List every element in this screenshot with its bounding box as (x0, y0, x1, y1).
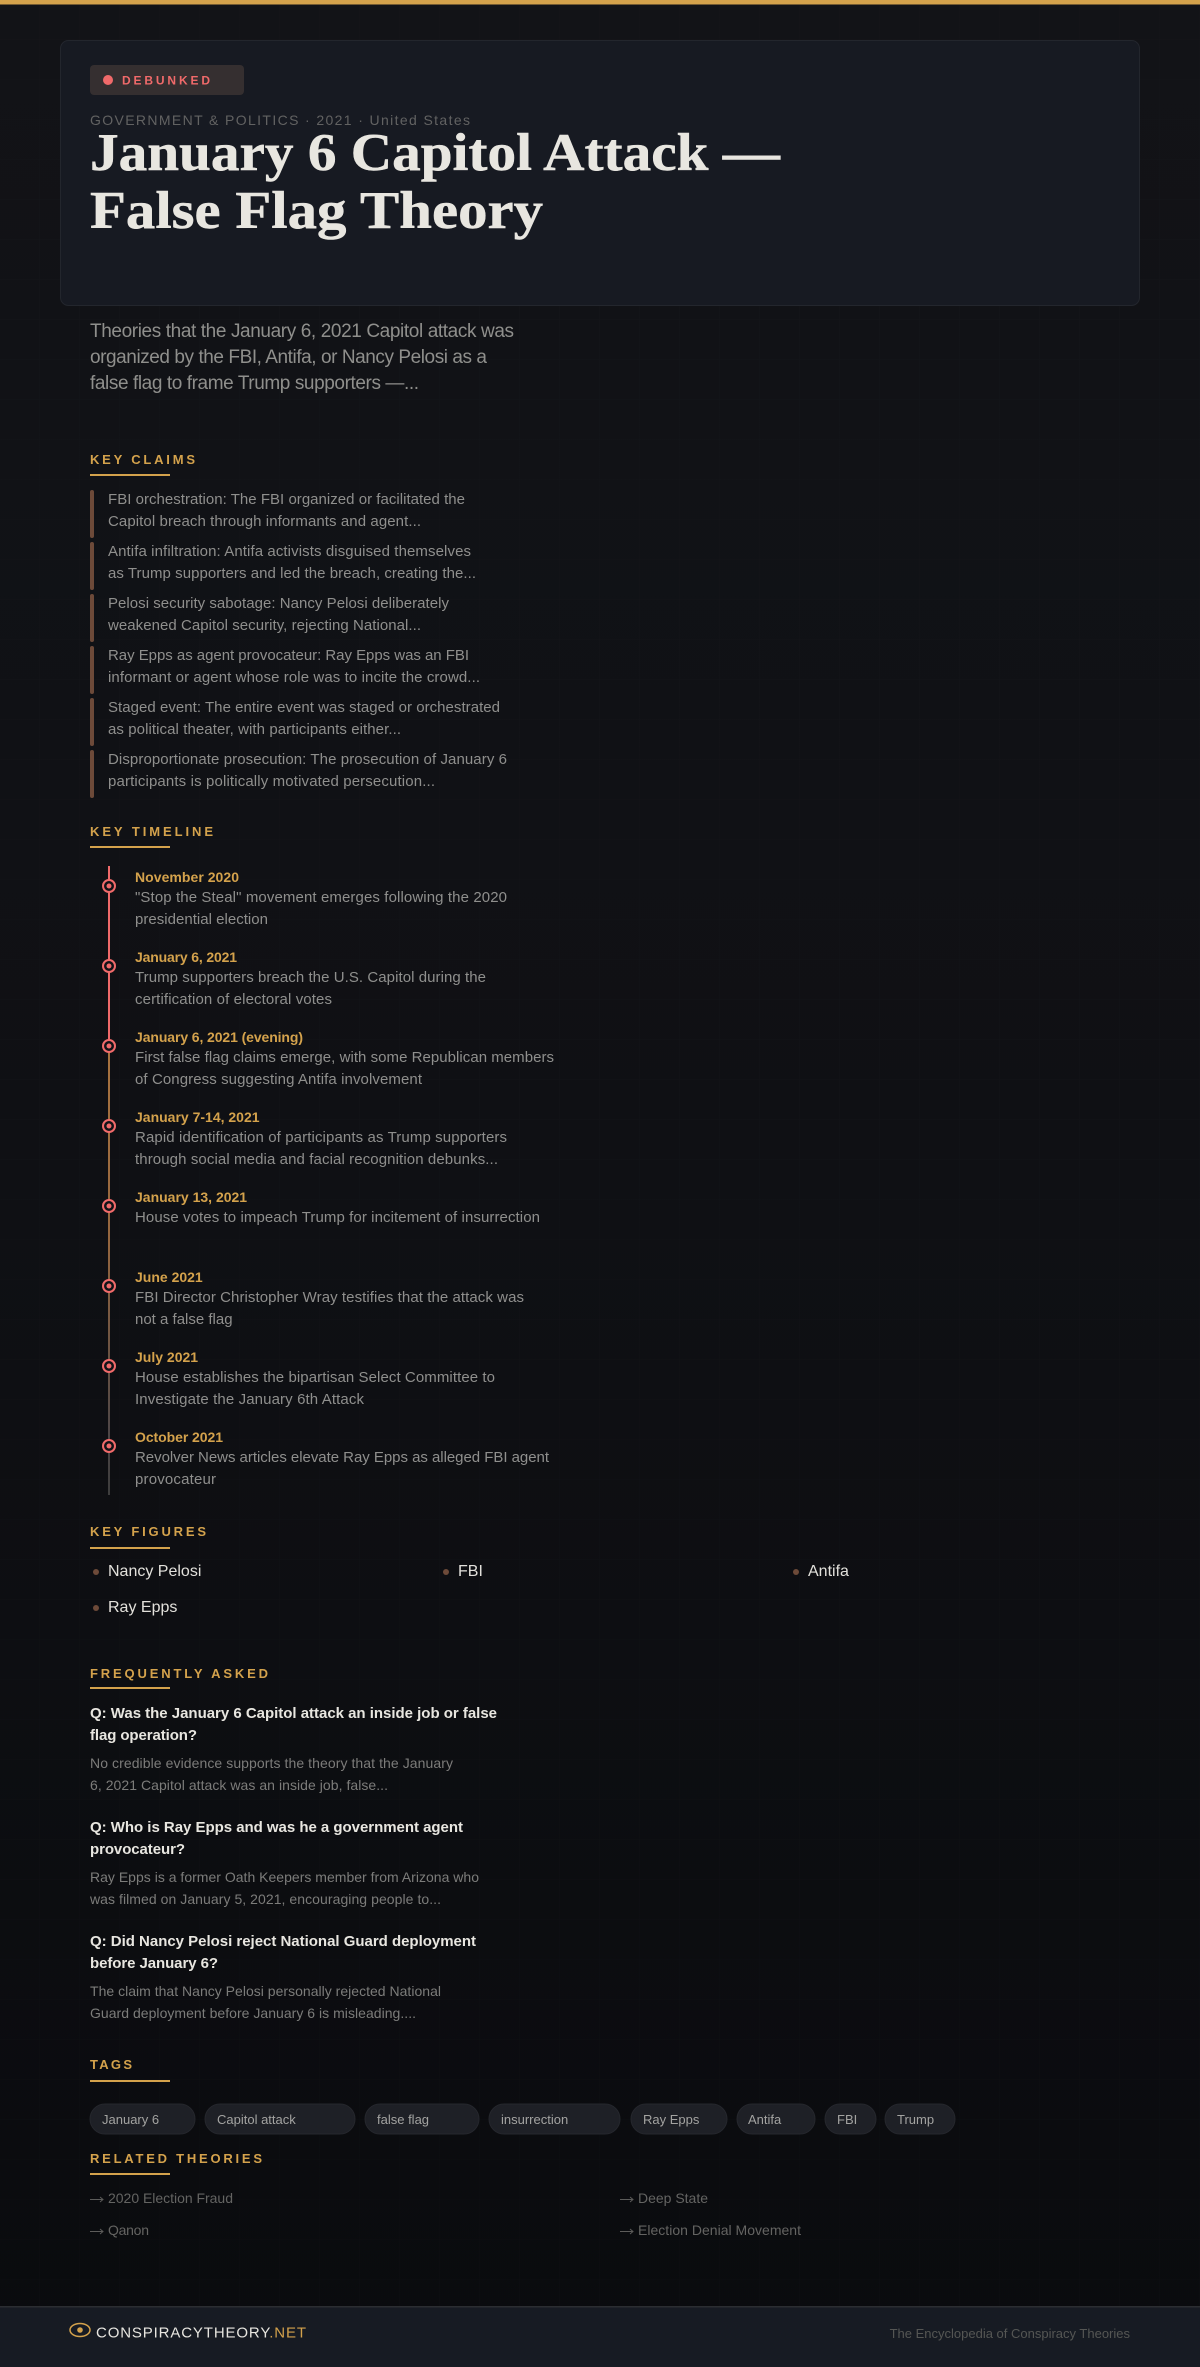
claim 6 (90, 750, 507, 798)
faq item 2: Ray Epps is a former Oath Keepers member from Arizona who (90, 1869, 479, 1885)
heading: key claims (90, 452, 198, 476)
summary text: Theories that the January 6, 2021 Capitol attack was (90, 321, 514, 342)
title (90, 124, 781, 240)
event: January 7-14, 2021: Rapid identification of participants as Trump supporters (135, 1129, 507, 1146)
claim 2: as Trump supporters and led the breach, creating the... (108, 565, 476, 582)
link: Election Denial Movement: Election Denial Movement (638, 2222, 801, 2238)
section: key claims (90, 452, 507, 798)
claim 3: weakened Capitol security, rejecting National... (107, 617, 421, 634)
section: key timeline (90, 824, 554, 1495)
heading: key timeline (90, 824, 216, 848)
heading: key figures: KEY FIGURES (90, 1524, 209, 1539)
claim 6: participants is politically motivated persecution... (108, 773, 435, 790)
heading: key timeline: KEY TIMELINE (90, 824, 216, 839)
claim 4: informant or agent whose role was to incite the crowd... (108, 669, 480, 686)
heading: tags: TAGS (90, 2057, 135, 2072)
claim 1: FBI orchestration: The FBI organized or facilitated the (108, 491, 465, 508)
event: January 6, 2021 evening: of Congress suggesting Antifa involvement (135, 1071, 423, 1088)
figure: Nancy Pelosi: Nancy Pelosi (108, 1563, 201, 1580)
section: tags (90, 2057, 955, 2134)
event: June 2021: not a false flag (135, 1311, 233, 1328)
tag: false flag: false flag (377, 2112, 429, 2127)
event: October 2021: Revolver News articles elevate Ray Epps as alleged FBI agent (135, 1449, 550, 1466)
claim 5: as political theater, with participants either... (108, 721, 401, 738)
event: July 2021: Investigate the January 6th Attack (135, 1391, 364, 1408)
tag: Trump (885, 2104, 955, 2134)
event: January 6, 2021 evening: January 6, 2021 (evening) (135, 1029, 303, 1045)
event: June 2021 (103, 1269, 524, 1328)
footer tagline: The Encyclopedia of Conspiracy Theories (890, 2326, 1130, 2341)
event: November 2020: November 2020 (135, 869, 239, 885)
claim 5 (90, 698, 500, 746)
event: January 6, 2021: certification of electoral votes (135, 991, 332, 1008)
claim 3 (90, 594, 450, 642)
faq item 1: Q: Was the January 6 Capitol attack an inside job or false (90, 1705, 497, 1722)
link: 2020 Election Fraud: 2020 Election Fraud (108, 2190, 233, 2206)
heading: frequently asked: FREQUENTLY ASKED (90, 1666, 271, 1681)
event: June 2021: June 2021 (135, 1269, 203, 1285)
heading: key figures (90, 1524, 209, 1549)
section: frequently asked (89, 1666, 497, 2021)
title: False Flag Theory (90, 182, 543, 240)
claim 1 (90, 490, 465, 538)
faq item 2 (89, 1819, 479, 1907)
event: January 7-14, 2021 (103, 1109, 507, 1168)
event: October 2021 (103, 1429, 550, 1488)
event: January 13, 2021: January 13, 2021 (135, 1189, 247, 1205)
faq item 3: Q: Did Nancy Pelosi reject National Guard deployment (90, 1933, 476, 1950)
faq item 3: before January 6? (90, 1955, 218, 1972)
event: July 2021 (103, 1349, 495, 1408)
figure: FBI (443, 1563, 483, 1580)
faq item 2: provocateur? (90, 1841, 185, 1858)
event: January 7-14, 2021: through social media and facial recognition debunks... (135, 1151, 498, 1168)
icon: eye logo (70, 2324, 90, 2336)
tag: Antifa (737, 2104, 815, 2134)
event: January 6, 2021 evening: First false flag claims emerge, with some Republican members (135, 1049, 554, 1066)
figure: Antifa: Antifa (808, 1563, 849, 1580)
tag: January 6 (90, 2104, 195, 2134)
status badge: debunked: DEBUNKED (122, 74, 210, 88)
tag: Ray Epps (631, 2104, 727, 2134)
title: January 6 Capitol Attack — (90, 124, 781, 182)
tag: Ray Epps: Ray Epps (643, 2112, 700, 2127)
event: July 2021: July 2021 (135, 1349, 198, 1365)
link: Deep State: Deep State (638, 2190, 708, 2206)
event: January 7-14, 2021: January 7-14, 2021 (135, 1109, 260, 1125)
figure: FBI: FBI (458, 1563, 483, 1580)
claim 4: Ray Epps as agent provocateur: Ray Epps was an FBI (108, 647, 469, 664)
faq item 3: The claim that Nancy Pelosi personally rejected National (90, 1983, 441, 1999)
tag: FBI: FBI (837, 2112, 857, 2127)
faq item 2: Q: Who is Ray Epps and was he a government agent (90, 1819, 463, 1836)
summary text: organized by the FBI, Antifa, or Nancy Pelosi as a (90, 347, 487, 368)
tag: FBI (825, 2104, 876, 2134)
timeline line (108, 866, 110, 1495)
tag: insurrection (489, 2104, 620, 2134)
faq item 1: No credible evidence supports the theory that the January (90, 1755, 453, 1771)
claim 4 (90, 646, 480, 694)
faq item 1: 6, 2021 Capitol attack was an inside job, false... (90, 1777, 388, 1793)
section: related theories (90, 2151, 801, 2238)
claim 2 (90, 542, 476, 590)
tag: January 6: January 6 (102, 2112, 159, 2127)
faq item 1: flag operation? (90, 1727, 197, 1744)
tag: Trump: Trump (897, 2112, 934, 2127)
event: October 2021: October 2021 (135, 1429, 223, 1445)
heading: tags (90, 2057, 170, 2082)
section: key figures (90, 1524, 849, 1616)
logo wordmark: CONSPIRACYTHEORY.NET (96, 2324, 306, 2342)
claim 1: Capitol breach through informants and agent... (108, 513, 421, 530)
event: October 2021: provocateur (135, 1471, 216, 1488)
link: Qanon (90, 2222, 149, 2238)
heading: related theories: RELATED THEORIES (90, 2151, 265, 2166)
event: January 6, 2021 (103, 949, 486, 1008)
tag: Antifa: Antifa (748, 2112, 782, 2127)
faq item 1 (90, 1705, 497, 1793)
event: November 2020 (103, 869, 507, 928)
panel: header card (60, 40, 1140, 306)
event: November 2020: "Stop the Steal" movement emerges following the 2020 (135, 889, 507, 906)
category line: GOVERNMENT & POLITICS · 2021 · United States (90, 112, 470, 128)
claim 3: Pelosi security sabotage: Nancy Pelosi deliberately (108, 595, 450, 612)
tag: insurrection: insurrection (501, 2112, 568, 2127)
link: Qanon: Qanon (108, 2222, 149, 2238)
tag: false flag (365, 2104, 479, 2134)
summary text: false flag to frame Trump supporters —... (90, 373, 419, 394)
footer (0, 2306, 1200, 2367)
faq item 3: Guard deployment before January 6 is misleading.... (90, 2005, 416, 2021)
event: January 6, 2021 evening (103, 1029, 554, 1088)
tag: Capitol attack: Capitol attack (217, 2112, 296, 2127)
heading: key claims: KEY CLAIMS (90, 452, 198, 467)
summary text (90, 321, 514, 394)
event: November 2020: presidential election (135, 911, 268, 928)
event: June 2021: FBI Director Christopher Wray testifies that the attack was (135, 1289, 524, 1306)
faq item 3 (90, 1933, 476, 2021)
event: January 6, 2021: January 6, 2021 (135, 949, 237, 965)
claim 6: Disproportionate prosecution: The prosecution of January 6 (108, 751, 507, 768)
event: January 6, 2021: Trump supporters breach the U.S. Capitol during the (135, 969, 486, 986)
claim 2: Antifa infiltration: Antifa activists disguised themselves (108, 543, 471, 560)
status badge: debunked (90, 65, 244, 95)
tag: Capitol attack (205, 2104, 355, 2134)
claim 5: Staged event: The entire event was staged or orchestrated (108, 699, 500, 716)
event: January 13, 2021: House votes to impeach Trump for incitement of insurrection (135, 1209, 540, 1226)
event: January 13, 2021 (103, 1189, 540, 1226)
event: July 2021: House establishes the bipartisan Select Committee to (135, 1369, 495, 1386)
figure: Ray Epps: Ray Epps (108, 1599, 177, 1616)
faq item 2: was filmed on January 5, 2021, encouraging people to... (89, 1891, 441, 1907)
